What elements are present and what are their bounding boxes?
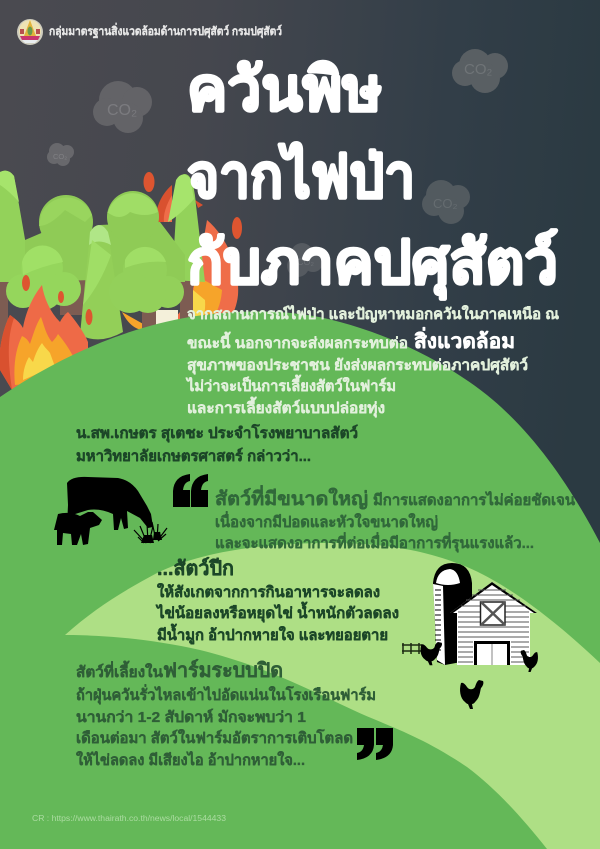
intro text: สิ่งแวดล้อม xyxy=(414,326,515,353)
quote: closed farm xyxy=(76,659,376,769)
quote: closed farm: ถ้าฝุ่นควันรั่วไหลเข้าไปอัดแน่นในโรงเรือนฟาร์ม xyxy=(76,684,376,705)
speaker attribution: มหาวิทยาลัยเกษตรศาสตร์ กล่าวว่า... xyxy=(76,447,311,465)
intro text: ขณะนี้ นอกจากจะส่งผลกระทบต่อ xyxy=(187,331,408,352)
quote: large animals: สัตว์ที่มีขนาดใหญ่ xyxy=(215,485,368,510)
title: จากไฟป่า xyxy=(187,141,415,210)
back fire xyxy=(122,185,238,340)
icon: cow and calf with grass xyxy=(54,477,167,545)
cloud: CO2 top right xyxy=(452,49,508,93)
quote: poultry: ให้สังเกตจากการกินอาหารจะลดลง xyxy=(157,583,380,601)
ember particles front xyxy=(22,275,92,325)
icon: chicken bottom xyxy=(460,680,483,709)
header organisation name: กลุ่มมาตรฐานสิ่งแวดล้อมด้านการปศุสัตว์ กรมปศุสัตว์ xyxy=(49,22,282,39)
icon: barn and silo xyxy=(433,563,537,665)
quote: poultry: มีน้ำมูก อ้าปากหายใจ และทยอยตาย xyxy=(157,623,388,645)
cloud: CO2 top right: CO₂ xyxy=(464,61,492,78)
title xyxy=(187,56,558,300)
icon: fence xyxy=(402,643,422,654)
cloud: CO2 large left: CO₂ xyxy=(107,102,137,119)
cloud: CO2 behind title: CO₂ xyxy=(297,257,314,267)
cloud: CO2 middle right xyxy=(422,180,470,224)
quote: poultry xyxy=(155,557,399,645)
trees xyxy=(0,171,205,360)
source credit: CR : https://www.thairath.co.th/news/local/1544433 xyxy=(32,814,227,823)
speaker attribution xyxy=(76,423,358,465)
cloud: CO2 small left xyxy=(47,143,74,166)
cloud: CO2 large left xyxy=(93,81,152,133)
logo xyxy=(17,19,43,45)
ember particles xyxy=(144,172,242,239)
quote: large animals: เนื่องจากมีปอดและหัวใจขนาดใหญ่ xyxy=(215,511,438,531)
quote: closed farm: เดือนต่อมา สัตว์ในฟาร์มอัตราการเติบโตลด xyxy=(76,728,353,747)
hill: main green xyxy=(0,312,600,849)
quote: closed farm: นานกว่า 1-2 สัปดาห์ มักจะพบว่า 1 xyxy=(76,708,306,726)
quote: closed farm: สัตว์ที่เลี้ยงใน xyxy=(76,660,164,681)
quote: closed farm: ให้ไข่ลดลง มีเสียงไอ อ้าปากหายใจ... xyxy=(76,750,305,769)
title: กับภาคปศุสัตว์ xyxy=(187,229,558,300)
intro text: จากสถานการณ์ไฟป่า และปัญหาหมอกควันในภาคเหนือ ณ xyxy=(187,304,559,323)
speaker attribution: น.สพ.เกษตร สุเตชะ ประจำโรงพยาบาลสัตว์ xyxy=(76,423,358,443)
title: ควันพิษ xyxy=(187,56,382,123)
icon: opening quote xyxy=(173,474,208,507)
intro text: และการเลี้ยงสัตว์แบบปล่อยทุ่ง xyxy=(187,396,385,418)
intro text xyxy=(185,304,559,418)
quote: large animals: มีการแสดงอาการไม่ค่อยชัดเจน xyxy=(373,490,576,509)
cloud: CO2 middle right: CO₂ xyxy=(433,196,458,211)
cloud: CO2 behind title xyxy=(287,243,323,277)
hill: light green crescent xyxy=(65,543,600,849)
cloud: CO2 small left: CO₂ xyxy=(53,152,67,161)
icon: chicken left xyxy=(421,642,442,665)
intro text: ไม่ว่าจะเป็นการเลี้ยงสัตว์ในฟาร์ม xyxy=(185,374,396,395)
quote: poultry: ไข่น้อยลงหรือหยุดไข่ น้ำหนักตัวลดลง xyxy=(155,601,399,623)
front fire xyxy=(0,285,88,390)
icon: closing quote xyxy=(357,728,393,760)
quote: poultry: ...สัตว์ปีก xyxy=(157,557,234,580)
quote: closed farm: ฟาร์มระบบปิด xyxy=(163,659,283,682)
quote: large animals xyxy=(215,485,576,553)
intro text: สุขภาพของประชาชน ยังส่งผลกระทบต่อภาคปศุสัตว์ xyxy=(187,356,528,375)
icon: chicken right xyxy=(521,650,538,672)
quote: large animals: และจะแสดงอาการที่ต่อเมื่อมีอาการที่รุนแรงแล้ว... xyxy=(215,532,534,553)
